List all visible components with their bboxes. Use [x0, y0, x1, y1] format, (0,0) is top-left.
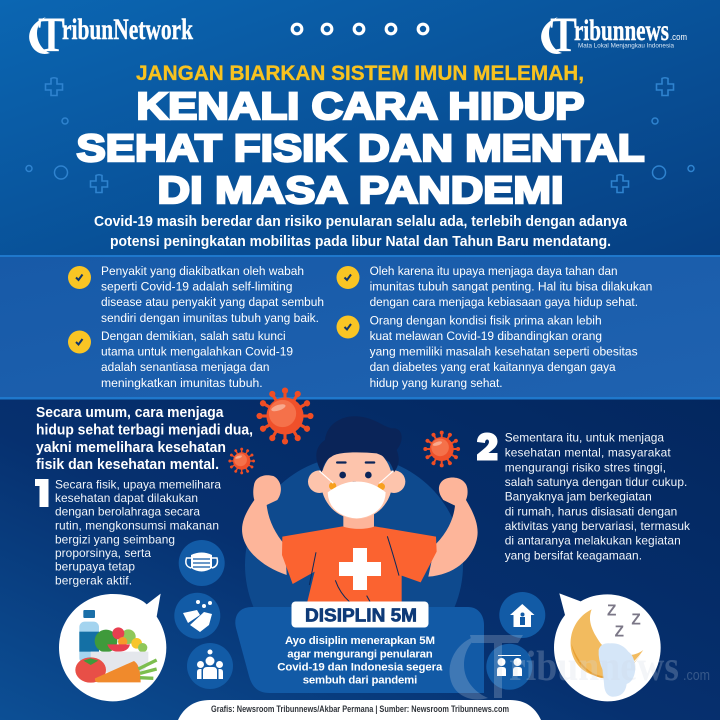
shirt cross — [339, 548, 381, 590]
text: physical health: dengan berolahraga secara — [55, 505, 200, 519]
footer credit: Grafis: Newsroom Tribunnews/Akbar Permana | Sumber: Newsroom Tribunnews.com — [211, 704, 509, 714]
heading: general explanation — [36, 405, 253, 473]
neck — [343, 513, 374, 533]
icon: home circle — [499, 592, 545, 638]
logo: Tribunnews.com — [541, 6, 687, 62]
icon: crowd circle — [187, 643, 233, 689]
eyes and eyebrows — [336, 461, 375, 483]
text: Disiplin 5M message: sembuh dari pandemi — [303, 674, 417, 686]
intro text: potensi peningkatan mobilitas pada libur Natal dan Tahun Baru mendatang. — [110, 233, 611, 250]
watermark — [450, 635, 710, 699]
text: mental health: kesehatan mental, masyarakat — [505, 445, 671, 459]
cheeks — [329, 482, 385, 490]
virus large — [256, 387, 314, 445]
bullet text 1 — [101, 264, 324, 325]
shirt — [282, 526, 437, 602]
water bottle — [79, 610, 99, 663]
footer credit — [178, 700, 541, 720]
bullet text 3: imunitas tubuh sangat penting. Hal itu bisa dilakukan — [370, 280, 653, 294]
tomato — [75, 657, 106, 683]
icon: washing hands circle — [174, 593, 220, 639]
bullet text 3: dengan cara menjaga kebiasaan gaya hidup sehat. — [370, 295, 638, 309]
logo: Tribunnews.com: .com — [670, 32, 687, 42]
sleep letters: Z — [607, 602, 616, 619]
circle behind person — [245, 456, 463, 674]
sleep letters: Z — [615, 624, 624, 641]
logo: TribunNetwork: ribunNetwork — [62, 13, 193, 46]
text: mental health: Banyaknya jam berkegiatan — [505, 490, 652, 504]
cloud — [599, 643, 635, 697]
text: mental health: di antaranya melakukan kegiatan — [505, 534, 681, 548]
watermark: .com — [683, 667, 710, 684]
intro text: Covid-19 masih beredar dan risiko penularan selalu ada, terlebih dengan adanya — [94, 213, 628, 230]
bullet text 3: Oleh karena itu upaya menjaga daya tahan dan — [370, 264, 618, 278]
title: yellow kicker: JANGAN BIARKAN SISTEM IMUN MELEMAH, — [136, 62, 584, 85]
heading: general explanation: yakni memelihara kesehatan — [36, 440, 226, 456]
virus right — [423, 431, 460, 467]
icon: check 2 — [68, 330, 91, 354]
icon: face mask circle — [179, 540, 225, 586]
icon: distancing couple circle — [486, 644, 532, 690]
text: Disiplin 5M message — [277, 635, 443, 686]
bullet text 2 — [101, 329, 293, 390]
bullet text 3 — [370, 264, 653, 309]
text: mental health — [505, 431, 690, 562]
text: physical health: proporsinya, serta — [55, 546, 151, 560]
virus small left — [228, 448, 255, 474]
header background — [0, 0, 720, 256]
icon: check 1 — [68, 266, 91, 289]
right arm — [428, 478, 478, 577]
bullet text 4: hidup yang kurang sehat. — [370, 376, 503, 390]
icon: check 3 — [336, 266, 360, 289]
bullet text 4: Orang dengan kondisi fisik prima akan lebih — [370, 314, 602, 328]
intro text — [94, 213, 628, 250]
pagination dots — [292, 24, 428, 34]
title: KENALI CARA HIDUP — [136, 86, 584, 128]
bowl — [91, 652, 148, 672]
bullet text 4: kuat melawan Covid-19 dibandingkan orang — [370, 329, 602, 343]
face — [321, 444, 392, 519]
bullet text 2: adalah senantiasa menjaga dan — [101, 360, 270, 374]
bullet text 1: disease atau penyakit yang dapat sembuh — [101, 295, 324, 309]
sleep letters — [607, 602, 641, 641]
number 2 — [477, 432, 498, 460]
bubble: healthy food — [59, 594, 166, 701]
number 1 — [35, 479, 48, 507]
logo: Tribunnews.com: Mata Lokal Menjangkau Indonesia — [578, 42, 674, 50]
text: Disiplin 5M message: agar mengurangi penularan — [287, 648, 433, 660]
text: physical health: rutin, mengkonsumsi makanan — [55, 518, 219, 532]
logo: TribunNetwork: T — [38, 6, 65, 62]
text: physical health: bergizi yang seimbang — [55, 532, 175, 546]
bullet text 1: Penyakit yang diakibatkan oleh wabah — [101, 264, 304, 278]
text: mental health: di rumah, harus disiasati dengan — [505, 504, 677, 518]
face mask — [328, 482, 386, 518]
bullet text 4 — [370, 314, 638, 390]
logo: Tribunnews.com: ribunnews — [574, 14, 669, 47]
ears — [308, 470, 405, 493]
bullet text 2: utama untuk mengalahkan Covid-19 — [101, 344, 293, 358]
heading: general explanation: hidup sehat terbagi menjadi dua, — [36, 422, 253, 438]
label: Disiplin 5M — [292, 602, 428, 628]
heading: general explanation: Secara umum, cara menjaga — [36, 405, 224, 421]
text: physical health: Secara fisik, upaya memelihara — [55, 477, 221, 491]
bullet text 1: sendiri dengan imunitas tubuh yang baik. — [101, 311, 319, 325]
person illustration — [242, 416, 478, 602]
hair — [316, 416, 402, 472]
shirt folds — [309, 536, 399, 602]
panel: Disiplin 5M — [235, 602, 484, 693]
text: physical health — [55, 477, 221, 587]
text: physical health: kesehatan dapat dilakukan — [55, 491, 198, 505]
title: SEHAT FISIK DAN MENTAL — [76, 128, 644, 170]
title — [76, 62, 644, 212]
moon — [571, 609, 643, 678]
decorative plus and circle icons — [26, 78, 694, 192]
text: mental health: aktivitas yang bervariasi, termasuk — [505, 519, 690, 533]
text: physical health: bergerak aktif. — [55, 573, 132, 587]
text: mental health: yang bersifat keagamaan. — [505, 548, 642, 562]
left arm — [242, 475, 287, 575]
bullet text 4: yang memiliki masalah kesehatan seperti obesitas — [370, 344, 638, 358]
carrot — [95, 660, 157, 682]
text: mental health: mengurangi risiko stres tinggi, — [505, 460, 666, 474]
logo: Tribunnews.com: T — [550, 6, 577, 62]
salad — [95, 627, 147, 652]
logo: TribunNetwork — [29, 6, 193, 62]
lower section background — [0, 399, 720, 720]
icon: check 4 — [336, 316, 360, 338]
watermark: ribunnews — [509, 644, 679, 690]
text: physical health: berupaya tetap — [55, 560, 135, 574]
panel: bullet band — [0, 255, 720, 400]
text: mental health: Sementara itu, untuk menjaga — [505, 431, 664, 445]
label: Disiplin 5M: DISIPLIN 5M — [305, 606, 417, 626]
title: DI MASA PANDEMI — [158, 170, 564, 212]
text: mental health: salah satunya dengan tidur cukup. — [505, 475, 687, 489]
bullet text 1: seperti Covid-19 adalah self-limiting — [101, 280, 293, 294]
bullet text 2: meningkatkan imunitas tubuh. — [101, 376, 263, 390]
mask straps — [319, 471, 393, 483]
text: Disiplin 5M message: Covid-19 dan Indonesia segera — [277, 661, 443, 673]
heading: general explanation: fisik dan kesehatan mental. — [36, 457, 219, 473]
bullet text 4: dan diabetes yang erat kaitannya dengan gaya — [370, 360, 616, 374]
bullet text 2: Dengan demikian, salah satu kunci — [101, 329, 286, 343]
text: Disiplin 5M message: Ayo disiplin menerapkan 5M — [285, 635, 435, 647]
bubble: sleep — [554, 593, 661, 701]
sleep letters: Z — [631, 612, 641, 629]
